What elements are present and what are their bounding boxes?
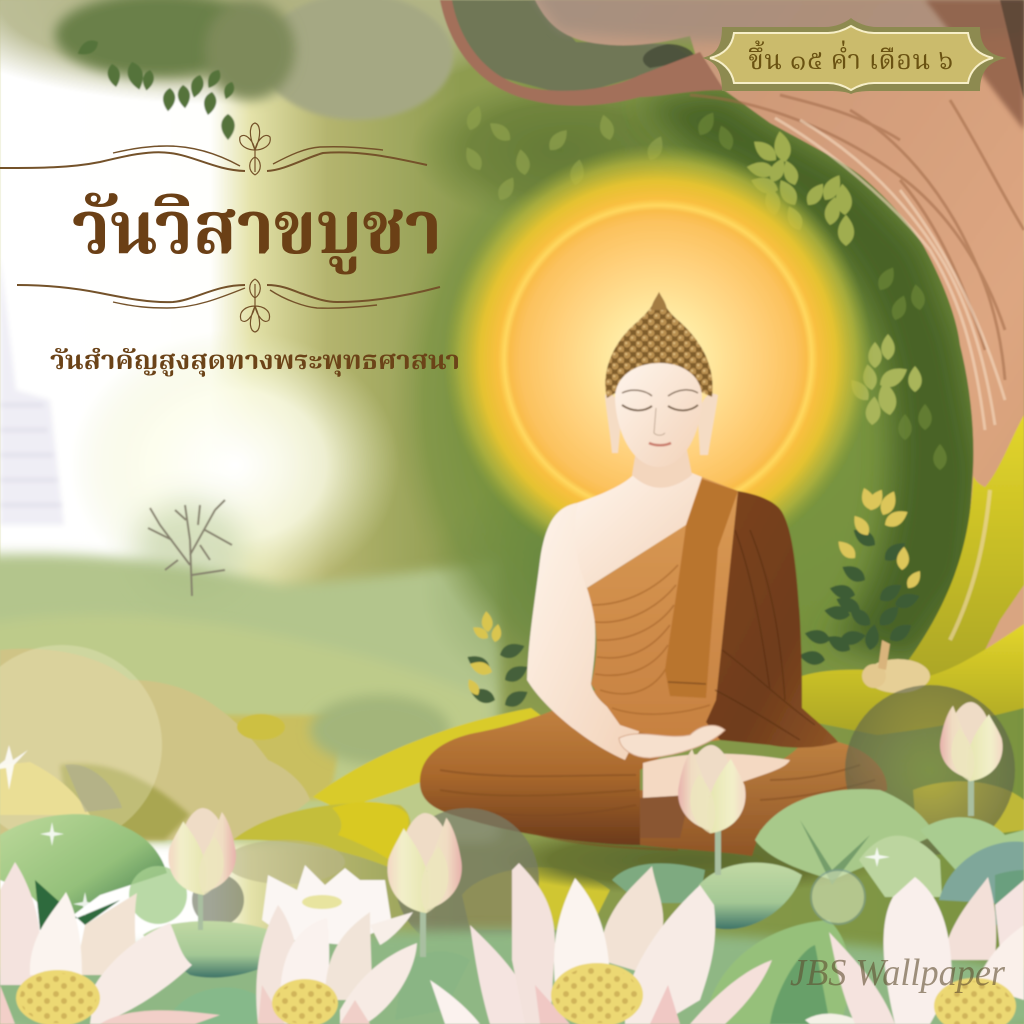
eyes, brows, nose and lips <box>622 390 698 445</box>
right leg and lap <box>640 742 887 856</box>
left leg and lap <box>420 690 720 845</box>
seated Buddha <box>420 292 887 856</box>
top ornament <box>0 123 427 175</box>
halo behind the head <box>443 144 873 574</box>
leafy cave behind the Buddha <box>390 55 1024 745</box>
date text: ขึ้น ๑๕ ค่ำ เดือน ๖ <box>748 40 954 75</box>
title: วันวิสาขบูชา <box>72 188 442 275</box>
subtitle: วันสำคัญสูงสุดทางพระพุทธศาสนา <box>50 346 460 378</box>
bare distant tree <box>135 500 245 600</box>
translucent dew bubbles <box>129 866 865 924</box>
bare left arm <box>527 503 640 760</box>
moss covered roots <box>233 624 1024 930</box>
robe panel draped from the shoulder <box>665 479 738 698</box>
lower legs <box>643 754 790 800</box>
face <box>615 363 702 467</box>
grass tuft and small yellow bush <box>237 695 450 765</box>
robe over chest <box>587 477 760 745</box>
signature watermark: JBS Wallpaper <box>790 952 1005 994</box>
ears <box>605 394 718 455</box>
sparkles <box>0 745 890 916</box>
tree trunk <box>530 0 1024 700</box>
lap fold lines <box>440 765 875 850</box>
right foliage cluster in the cave <box>846 334 922 426</box>
top olive canopy patches <box>55 0 696 120</box>
folded hands <box>619 725 725 758</box>
distant hills <box>0 554 500 840</box>
large lotus centre <box>430 863 772 1024</box>
upper foliage cluster in the cave <box>746 130 854 246</box>
robe folds <box>592 565 710 714</box>
top-left hanging leaves <box>75 37 236 140</box>
date badge <box>702 18 1007 94</box>
lotus leaves <box>0 789 1024 1024</box>
bare chest <box>575 473 702 588</box>
small plants beside the Buddha <box>464 486 924 711</box>
sleeve fold lines <box>668 530 815 740</box>
resting rabbit <box>862 640 930 693</box>
tree branch <box>440 0 724 106</box>
dim foliage on the cave wall <box>694 109 947 470</box>
large lotus right <box>805 877 1024 1024</box>
large lotus centre-left <box>256 865 417 1024</box>
lotus bud right <box>940 702 1003 816</box>
bottom ornament <box>17 279 440 332</box>
hair curls <box>605 292 713 398</box>
neck <box>632 445 692 488</box>
base foliage behind the lotus flowers <box>0 930 1024 1024</box>
foreground misty bubbles <box>0 645 1015 952</box>
large lotus left <box>0 862 220 1024</box>
lotus bud near the lap <box>678 745 746 875</box>
shadow between legs <box>640 795 690 838</box>
lotus bud centre <box>387 813 462 957</box>
robe over right shoulder and arm <box>706 491 838 748</box>
ushnisha tip <box>651 292 667 310</box>
background foliage leaves <box>461 103 667 203</box>
lotus bud left <box>168 808 236 930</box>
distant white stupa <box>0 255 64 525</box>
